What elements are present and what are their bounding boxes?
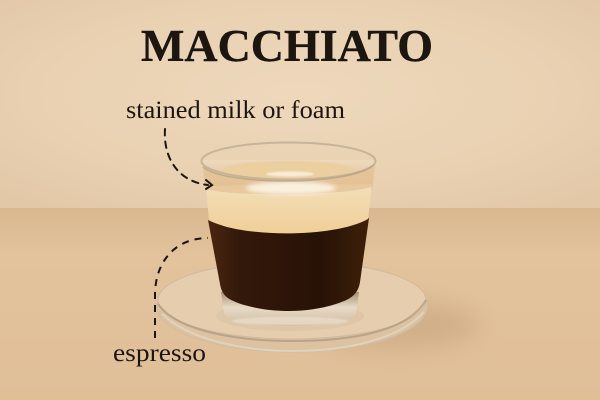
label: espresso: espresso — [113, 340, 206, 367]
label: stained milk or foam: stained milk or foam — [126, 97, 346, 124]
espresso layer — [208, 218, 369, 311]
background wall — [0, 0, 600, 208]
glass saucer — [157, 260, 427, 352]
saucer shadow — [310, 301, 480, 349]
glass front wall — [203, 166, 375, 194]
arrow: espresso callout — [155, 238, 208, 338]
foam highlight — [246, 182, 336, 194]
table surface — [0, 208, 600, 400]
foam layer — [206, 184, 372, 233]
arrow: milk callout — [165, 129, 212, 189]
title: MACCHIATO — [141, 21, 433, 71]
cup rear wall tint — [201, 160, 376, 192]
foam top surface — [222, 161, 354, 179]
glass cup — [201, 142, 376, 326]
cup base — [221, 292, 359, 326]
glass rim — [202, 142, 376, 180]
